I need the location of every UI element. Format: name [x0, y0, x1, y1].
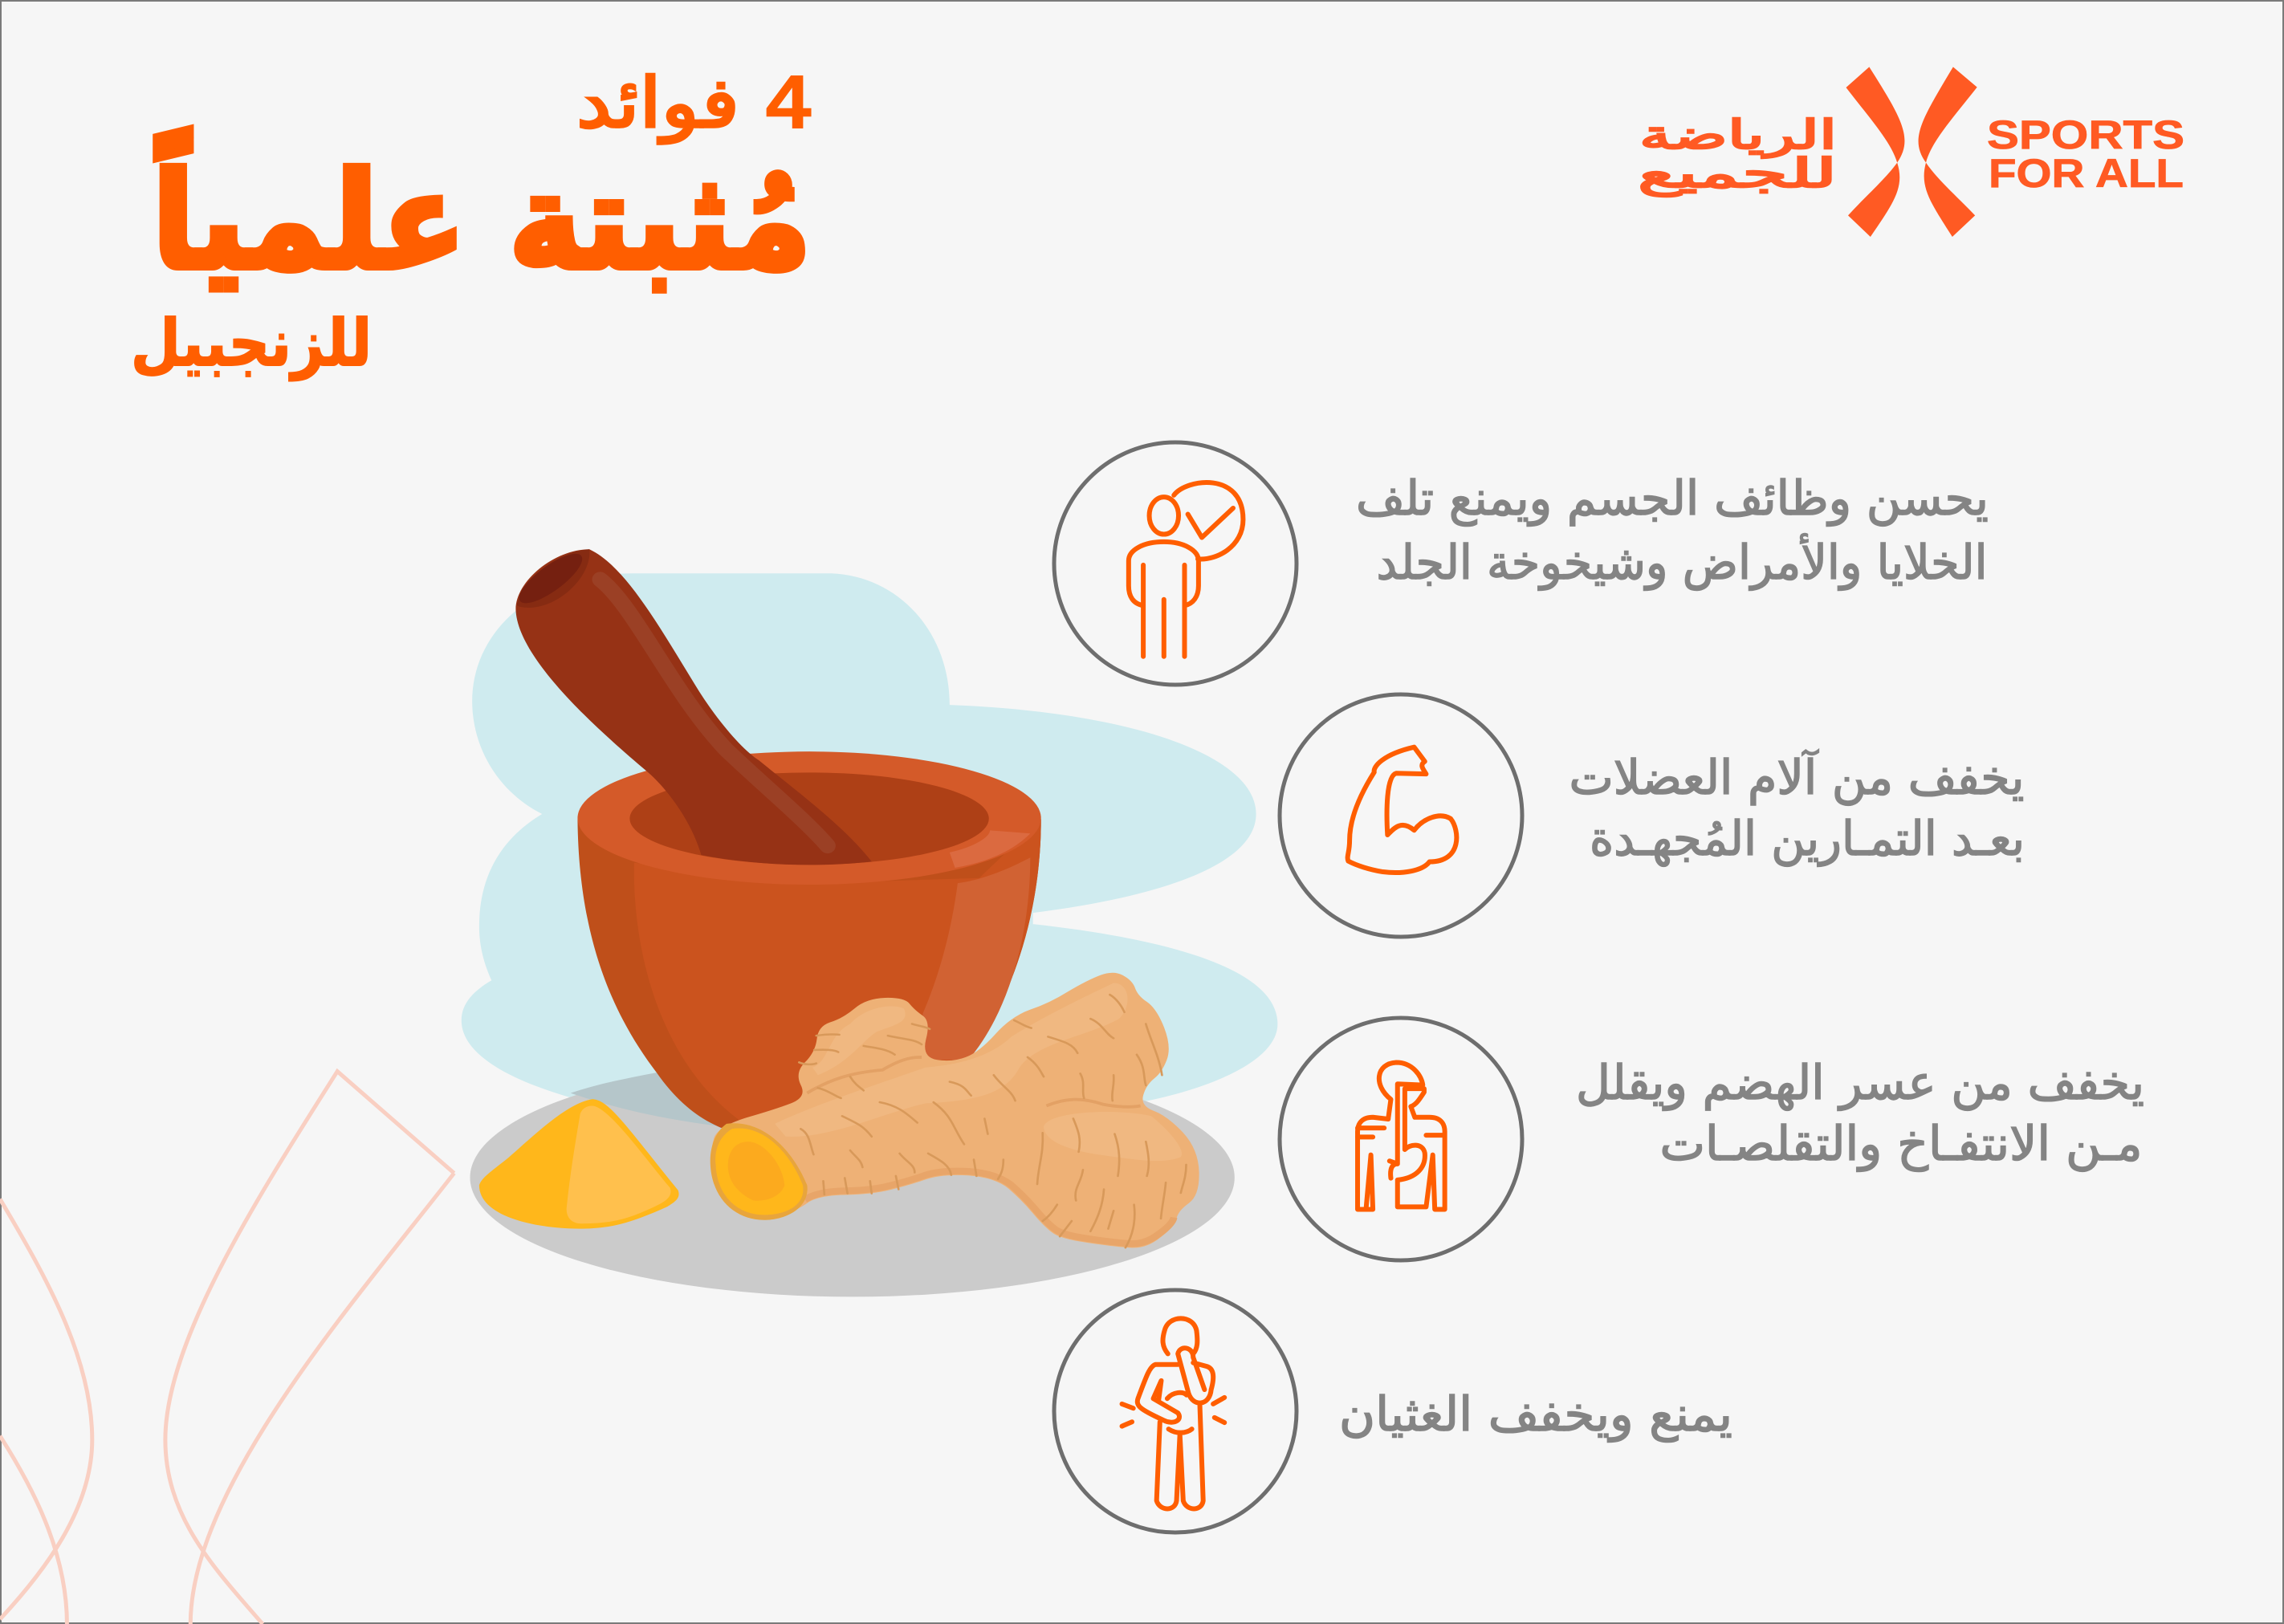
logo: Sports for All [1638, 67, 2184, 237]
benefit 2 text: بعـد التمـارين المُجهـدة [1590, 811, 2025, 867]
icon: flexed arm muscle [1348, 747, 1456, 873]
benefit 1 [1054, 442, 1989, 685]
logo english wordmark: FOR ALL [1989, 151, 2184, 196]
pestle [512, 546, 872, 865]
icon: digestive system [1358, 1062, 1445, 1210]
turmeric powder pile [479, 1099, 679, 1229]
benefit 3 text [1576, 1055, 2144, 1172]
logo arabic wordmark: للجميع [1638, 150, 1837, 197]
logo english wordmark: SPORTS [1987, 112, 2184, 157]
benefit 3 text: مـن الانتفـاخ والتقلصـات [1660, 1116, 2142, 1172]
benefit 3 [1280, 1018, 2144, 1260]
logo arabic wordmark: الرياضة [1639, 112, 1837, 158]
ginger skin wrinkles [799, 995, 1187, 1248]
plate and blob overlap shadow [571, 1072, 721, 1126]
icon: nauseous person [1122, 1318, 1224, 1508]
mortar bowl [577, 751, 1041, 1128]
logo arabic wordmark [1638, 112, 1837, 197]
ginger root [710, 973, 1199, 1248]
grey plate [470, 1058, 1235, 1296]
benefit 3 text: يخفف من عسر الهضم ويقلل [1576, 1055, 2144, 1111]
illustration: mortar, pestle and ginger [462, 546, 1277, 1296]
title line: 4 benefits: 4 فوائد [576, 63, 814, 144]
pale blue background blob [462, 573, 1277, 1124]
benefit 2 [1280, 694, 2025, 937]
icon circle 1 [1054, 442, 1297, 685]
benefit 1 text [1356, 470, 1989, 591]
icon: person with check mark [1129, 482, 1243, 657]
title line: of ginger: للزنجبيل [131, 306, 372, 381]
title line: scientifically proven: مُثبتة علمياً [153, 128, 811, 299]
benefit 2 text: يخفف من آلام العضلات [1569, 749, 2025, 806]
benefit 1 text: الخلايا والأمراض وشيخوخة الجلد [1376, 534, 1988, 591]
benefit 4 [1054, 1290, 1732, 1532]
title block [131, 63, 814, 381]
benefit 2 text [1569, 749, 2025, 867]
benefit 4 text: يمنع ويخفف الغثيان [1339, 1386, 1732, 1443]
ginger cut end [710, 1123, 808, 1220]
logo english wordmark [1987, 112, 2184, 196]
benefit 1 text: يحسن وظائف الجسم ويمنع تلف [1356, 470, 1989, 527]
icon circle 4 [1054, 1290, 1297, 1532]
logo mark [1846, 67, 1977, 237]
icon circle 3 [1280, 1018, 1522, 1260]
decorative logo outline lines [0, 1072, 454, 1624]
icon circle 2 [1280, 694, 1522, 937]
